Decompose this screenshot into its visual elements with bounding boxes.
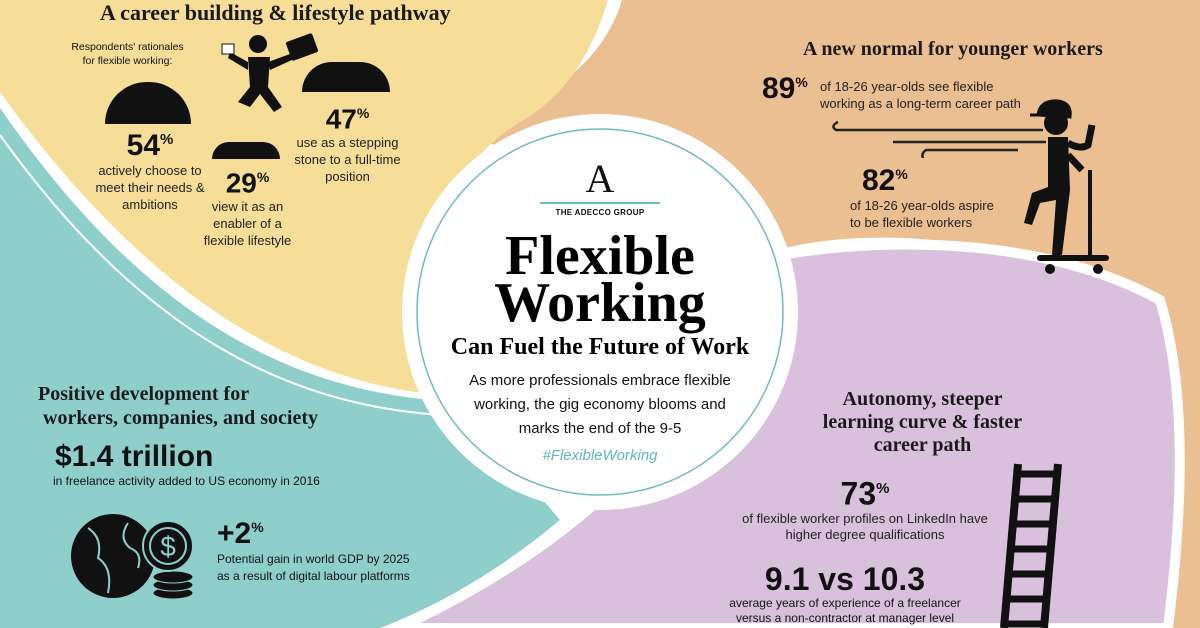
description [469,372,731,437]
icon: scooter rider [1024,99,1109,274]
stat: 54% [95,129,205,212]
text: of 18-26 year-olds see flexible working as a long-term career path [820,79,1021,111]
stat: 82% [850,164,994,230]
center circle content [451,156,750,464]
heading: younger workers: A new normal for younger workers [803,38,1103,60]
icon: dome 54 [105,82,191,124]
stat: 9.1 vs 10.3 [729,561,961,625]
stat: +2%: +2% [217,517,264,550]
center circle content: THE ADECCO GROUP [556,208,644,217]
stat: 9.1 vs 10.3: 9.1 vs 10.3 [765,561,925,597]
subtitle: Can Fuel the Future of Work [451,334,749,360]
stat: 9.1 vs 10.3: average years of experience of a freelancer versus a non-contractor at manager level [729,596,961,625]
heading: career building: A career building & lifestyle pathway [100,0,451,25]
stat: 47% [294,103,401,184]
stat: 82%: of 18-26 year-olds aspire to be flexible workers [850,198,994,230]
stat: 29% [204,167,291,248]
stat: 73% [742,476,988,542]
stat: 29%: 29% [226,167,269,198]
heading: positive development: Positive development for [38,383,249,405]
stat: 54%: 54% [127,129,173,162]
stat: 47%: use as a stepping stone to a full-time position [294,135,401,184]
icon: running businessman [222,33,318,112]
icon: globe and coins [71,514,192,598]
description: marks the end of the 9-5 [519,420,681,437]
heading: positive development: workers, companies, and society [43,407,318,429]
title: Working [494,272,706,334]
stat: 73%: of flexible worker profiles on LinkedIn have higher degree qualifications [742,511,988,542]
icon: ladder [1000,464,1062,628]
stat: 73%: 73% [841,476,889,512]
stat: +2% [217,517,410,583]
description: working, the gig economy blooms and [474,396,726,413]
stat: 89% [762,72,1021,111]
title [494,225,706,334]
stat: 54%: actively choose to meet their needs & ambitions [95,163,205,212]
icon: globe and coins: $ [160,531,176,562]
icon: dome 29 [212,142,280,159]
hashtag: #FlexibleWorking [542,447,658,464]
stat: 29%: view it as an enabler of a flexible lifestyle [204,199,291,248]
description: As more professionals embrace flexible [469,372,731,389]
text: 89% [762,72,808,105]
text: respondents rationales: Respondents' rationales for flexible working: [71,41,184,67]
stat: 1.4 trillion: $1.4 trillion [55,440,213,473]
speed lines [832,120,1046,158]
stat: 82%: 82% [862,164,908,197]
title: Flexible [505,225,695,287]
stat: +2%: Potential gain in world GDP by 2025 as a result of digital labour platforms [217,552,410,583]
heading: positive development [38,383,318,429]
stat: 1.4 trillion [53,440,320,488]
icon: dome 47 [302,62,390,92]
heading: autonomy: Autonomy, steeper learning curve & faster career path [823,388,1022,456]
stat: 47%: 47% [326,103,369,134]
stat: 1.4 trillion: in freelance activity added to US economy in 2016 [53,474,320,488]
logo: A [586,156,614,201]
